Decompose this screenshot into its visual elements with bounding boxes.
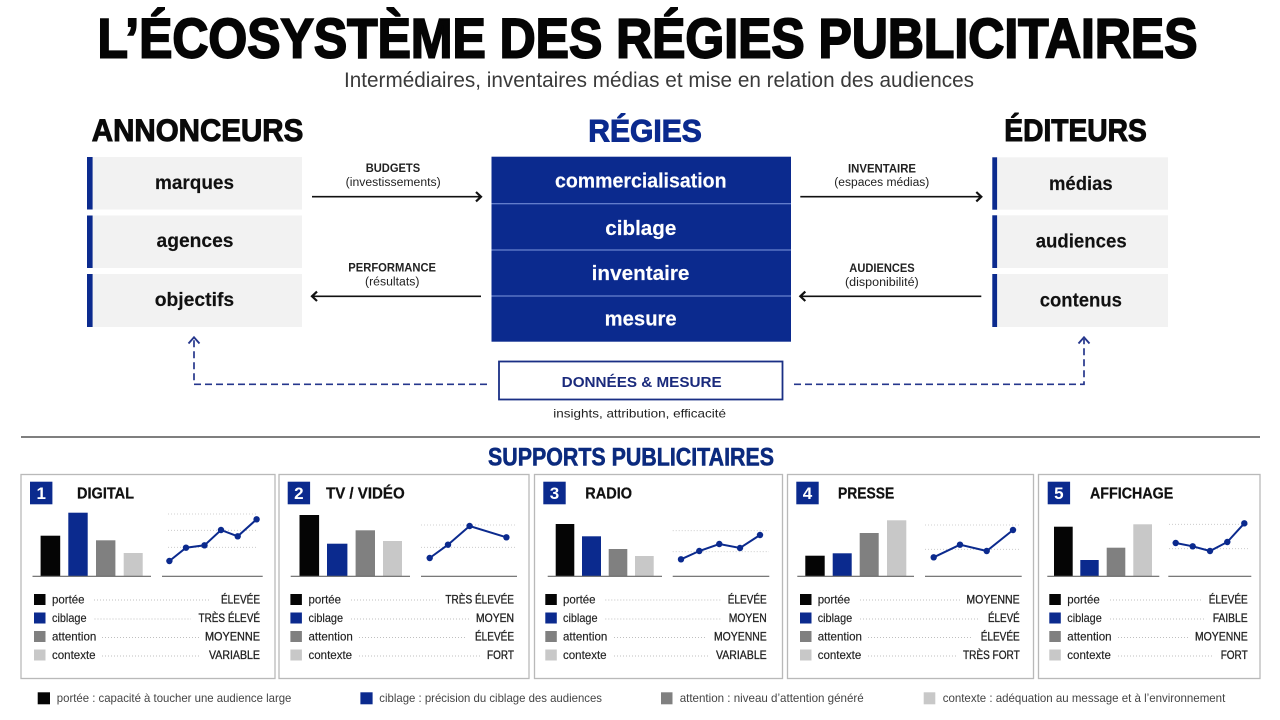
line chart [673, 531, 769, 576]
bar chart [32, 513, 151, 576]
metrics table: portée [563, 592, 596, 606]
bar chart [1047, 524, 1159, 576]
row: médias: médias [1049, 173, 1113, 195]
row: audiences [992, 215, 1168, 268]
line chart [162, 514, 263, 576]
line chart [421, 523, 517, 576]
badge 2: 2 [294, 484, 304, 503]
heading: affichage: AFFICHAGE [1090, 486, 1173, 502]
badge 1: 1 [36, 484, 46, 503]
metrics table: ÉLEVÉE [728, 592, 767, 606]
arrow: budgets [312, 163, 481, 201]
callout: données et mesure: insights, attribution, efficacité [553, 406, 726, 420]
row: agences [87, 216, 302, 268]
badge 3 [543, 482, 566, 504]
metrics table: MOYEN [476, 611, 514, 625]
panel: tv / vidéo [279, 474, 529, 678]
heading: presse: PRESSE [838, 486, 894, 502]
panel: annonceurs [87, 112, 303, 327]
arrow: budgets: (investissements) [346, 177, 441, 189]
badge 5 [1048, 482, 1070, 504]
badge 3: 3 [550, 484, 559, 503]
bar chart [548, 524, 662, 576]
heading: tv / vidéo: TV / VIDÉO [326, 486, 405, 502]
row: marques: marques [155, 172, 234, 194]
metrics table [290, 592, 514, 662]
panel: digital [21, 474, 275, 678]
arrow: audiences [800, 263, 981, 301]
metrics table [800, 592, 1020, 662]
metrics table: MOYENNE [966, 592, 1020, 606]
metrics table: attention [308, 630, 353, 644]
panel: éditeurs [992, 112, 1168, 327]
metrics table: ÉLEVÉ [988, 611, 1020, 625]
metrics table [34, 592, 260, 662]
callout: données et mesure: DONNÉES & MESURE [562, 374, 722, 391]
callout: données et mesure [499, 362, 782, 420]
arrow: performance: PERFORMANCE [348, 263, 436, 275]
metrics table: ÉLEVÉE [981, 630, 1020, 644]
badge 1 [30, 482, 52, 504]
panel: radio [534, 474, 782, 678]
bar chart [291, 515, 410, 576]
metrics table: ciblage [1067, 611, 1102, 625]
heading: radio: RADIO [585, 486, 632, 502]
legend item: attention: attention : niveau d’attention généré [680, 691, 864, 705]
metrics table: ÉLEVÉE [1209, 592, 1248, 606]
metrics table: FORT [1221, 648, 1248, 662]
legend item: portée: portée : capacité à toucher une audience large [57, 691, 292, 705]
metrics table: TRÈS ÉLEVÉ [198, 611, 260, 625]
heading: supports publicitaires: SUPPORTS PUBLICITAIRES [488, 444, 774, 472]
metrics table [1049, 592, 1248, 662]
heading: éditeurs: ÉDITEURS [1004, 112, 1147, 148]
row: marques [87, 157, 302, 210]
metrics table: attention [1067, 630, 1112, 644]
metrics table: contexte [818, 648, 862, 662]
metrics table: portée [818, 592, 851, 606]
row: médias [992, 157, 1168, 210]
metrics table: MOYENNE [1195, 630, 1248, 644]
metrics table: ciblage [52, 611, 87, 625]
row: contenus [992, 274, 1168, 327]
line chart [1168, 520, 1251, 576]
dashed arrow: vers éditeurs [794, 337, 1090, 384]
stack item: commercialisation: commercialisation [555, 171, 726, 193]
metrics table: MOYENNE [714, 630, 767, 644]
heading: annonceurs: ANNONCEURS [92, 112, 303, 148]
metrics table: VARIABLE [209, 648, 260, 662]
metrics table: ciblage [818, 611, 853, 625]
metrics table: portée [52, 592, 85, 606]
arrow: performance [312, 263, 481, 301]
badge 5: 5 [1054, 484, 1064, 503]
metrics table: MOYEN [729, 611, 767, 625]
metrics table: FORT [487, 648, 514, 662]
arrow: audiences: AUDIENCES [849, 263, 915, 275]
row: audiences: audiences [1036, 230, 1127, 252]
metrics table: ÉLEVÉE [221, 592, 260, 606]
stack item: inventaire: inventaire [592, 263, 689, 285]
arrow: inventaire [800, 163, 981, 201]
heading: régies: RÉGIES [588, 113, 702, 149]
legend [38, 691, 1226, 705]
metrics table: contexte [1067, 648, 1111, 662]
metrics table: portée [308, 592, 341, 606]
metrics table: attention [818, 630, 862, 644]
row: objectifs [87, 274, 302, 327]
panel: presse [788, 474, 1034, 678]
bar chart [797, 520, 914, 576]
metrics table: attention [52, 630, 96, 644]
legend item: ciblage: ciblage : précision du ciblage des audiences [379, 691, 602, 705]
metrics table: contexte [563, 648, 607, 662]
metrics table: ciblage [308, 611, 343, 625]
arrow: performance: (résultats) [365, 277, 420, 289]
dashed arrow: vers annonceurs [188, 337, 487, 384]
badge 4 [796, 482, 819, 504]
metrics table: MOYENNE [205, 630, 260, 644]
line chart [925, 525, 1022, 576]
arrow: budgets: BUDGETS [366, 163, 421, 175]
metrics table: contexte [308, 648, 353, 662]
arrow: inventaire: INVENTAIRE [848, 163, 916, 175]
metrics table: portée [1067, 592, 1100, 606]
subtitle: Intermédiaires, inventaires médias et mise en relation des audiences [344, 69, 974, 92]
metrics table: ciblage [563, 611, 598, 625]
stack item: ciblage: ciblage [605, 218, 676, 240]
heading: digital: DIGITAL [77, 486, 134, 502]
metrics table: TRÈS ÉLEVÉE [445, 592, 514, 606]
metrics table [545, 592, 767, 662]
metrics table: ÉLEVÉE [475, 630, 514, 644]
stack item: mesure: mesure [605, 309, 677, 331]
row: contenus: contenus [1040, 290, 1122, 312]
arrow: inventaire: (espaces médias) [834, 177, 929, 189]
metrics table: contexte [52, 648, 96, 662]
metrics table: TRÈS FORT [963, 648, 1020, 662]
metrics table: attention [563, 630, 607, 644]
metrics table: VARIABLE [716, 648, 767, 662]
arrow: audiences: (disponibilité) [845, 277, 919, 289]
metrics table: FAIBLE [1213, 611, 1248, 625]
badge 2 [288, 482, 310, 504]
badge 4: 4 [803, 484, 813, 503]
legend item: contexte: contexte : adéquation au message et à l’environnement [943, 691, 1226, 705]
row: agences: agences [156, 230, 234, 252]
row: objectifs: objectifs [155, 289, 234, 311]
panel: régies [492, 113, 791, 342]
panel: affichage [1038, 474, 1260, 678]
